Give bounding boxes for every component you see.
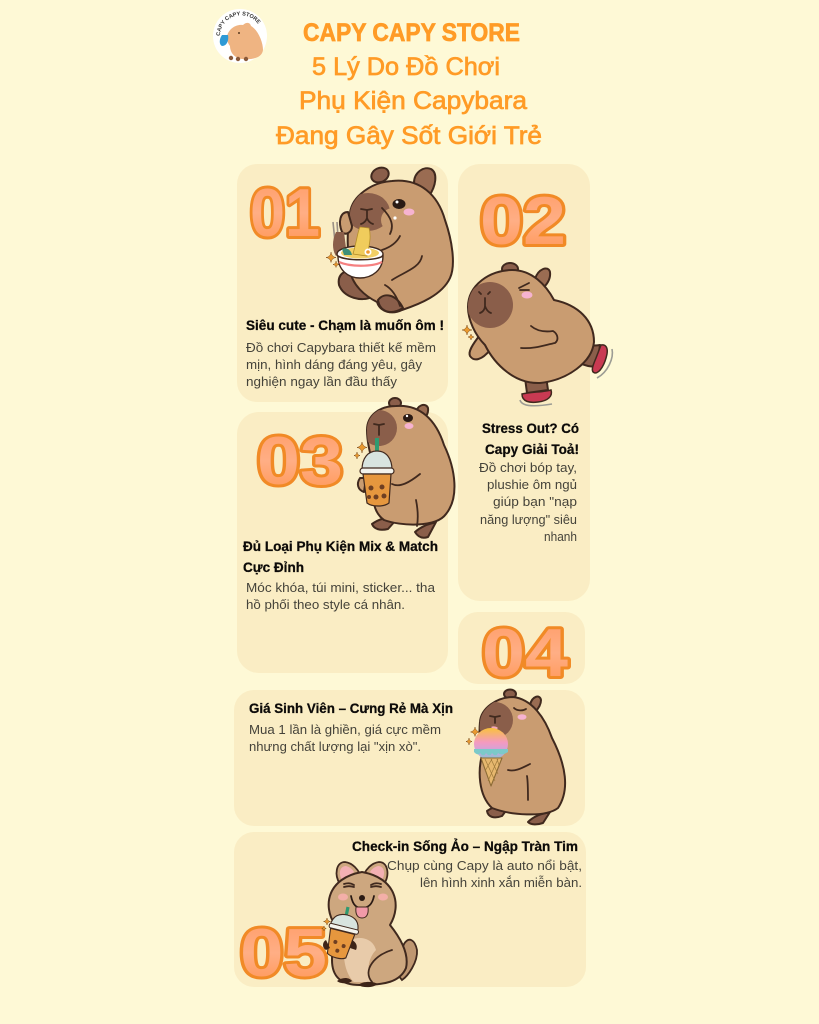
text block: reason 1: mịn, hình dáng đáng yêu, gây	[246, 357, 423, 372]
text block: reason 1: Đồ chơi Capybara thiết kế mềm	[246, 340, 436, 355]
text block: reason 4: Giá Sinh Viên – Cưng Rẻ Mà Xịn	[249, 701, 453, 716]
text block: reason 3	[243, 539, 438, 612]
text block: reason 5: Check-in Sống Ảo – Ngập Tràn Tim	[352, 839, 578, 854]
logo: Capy Capy Store badge: CAPY CAPY STORE	[216, 12, 261, 36]
number 05: 05	[240, 915, 327, 991]
title: Đang Gây Sốt Giới Trẻ	[276, 122, 542, 150]
text block: reason 3: Móc khóa, túi mini, sticker... tha	[246, 580, 436, 595]
text block: reason 2: Stress Out? Có	[482, 421, 579, 436]
text block: reason 3: Đủ Loại Phụ Kiện Mix & Match	[243, 539, 438, 554]
text block: reason 5: lên hình xinh xắn miễn bàn.	[420, 875, 582, 890]
number 04: 04	[482, 615, 568, 691]
title: Phụ Kiện Capybara	[299, 87, 527, 115]
text block: reason 2	[479, 421, 579, 544]
text block: reason 1	[246, 318, 444, 389]
illustration: quokka with bubble tea	[322, 862, 417, 987]
text block: reason 1: nghiện ngay lần đầu thấy	[246, 374, 398, 389]
illustration: capybara with ice cream	[466, 690, 565, 824]
logo: Capy Capy Store badge	[213, 9, 267, 63]
panel: reason 2 background	[458, 164, 590, 601]
text block: reason 4: nhưng chất lượng lại "xịn xò".	[249, 739, 421, 754]
panel: reason 3 background	[237, 412, 448, 673]
title: CAPY CAPY STORE	[303, 19, 520, 47]
illustration: capybara ice skating	[462, 263, 612, 406]
number 01: 01	[250, 175, 320, 251]
title	[276, 19, 542, 150]
text block: reason 4: Mua 1 lần là ghiền, giá cực mềm	[249, 722, 441, 737]
text block: reason 2: nhanh	[544, 529, 577, 544]
text block: reason 3: hồ phối theo style cá nhân.	[246, 597, 405, 612]
panel: reason 4 background	[234, 690, 585, 826]
text block: reason 4	[249, 701, 453, 754]
illustration: capybara eating noodles	[326, 165, 453, 312]
text block: reason 2: giúp bạn "nạp	[493, 494, 577, 509]
number 03: 03	[257, 423, 343, 499]
text block: reason 1: Siêu cute - Chạm là muốn ôm !	[246, 318, 444, 333]
text block: reason 3: Cực Đỉnh	[243, 560, 304, 575]
illustration: capybara with bubble tea	[354, 398, 454, 538]
text block: reason 5: Chụp cùng Capy là auto nổi bật,	[387, 858, 582, 873]
number 02: 02	[480, 183, 566, 259]
panel: reason 5 background	[234, 832, 586, 987]
panel: reason 1 background	[237, 164, 448, 402]
text block: reason 2: Đồ chơi bóp tay,	[479, 460, 577, 475]
title: 5 Lý Do Đồ Chơi	[312, 53, 500, 81]
text block: reason 2: plushie ôm ngủ	[487, 477, 577, 492]
text block: reason 2: Capy Giải Toả!	[485, 442, 579, 457]
panel: number 04 background	[458, 612, 585, 684]
text block: reason 5	[352, 839, 582, 890]
text block: reason 2: năng lượng" siêu	[480, 512, 577, 527]
